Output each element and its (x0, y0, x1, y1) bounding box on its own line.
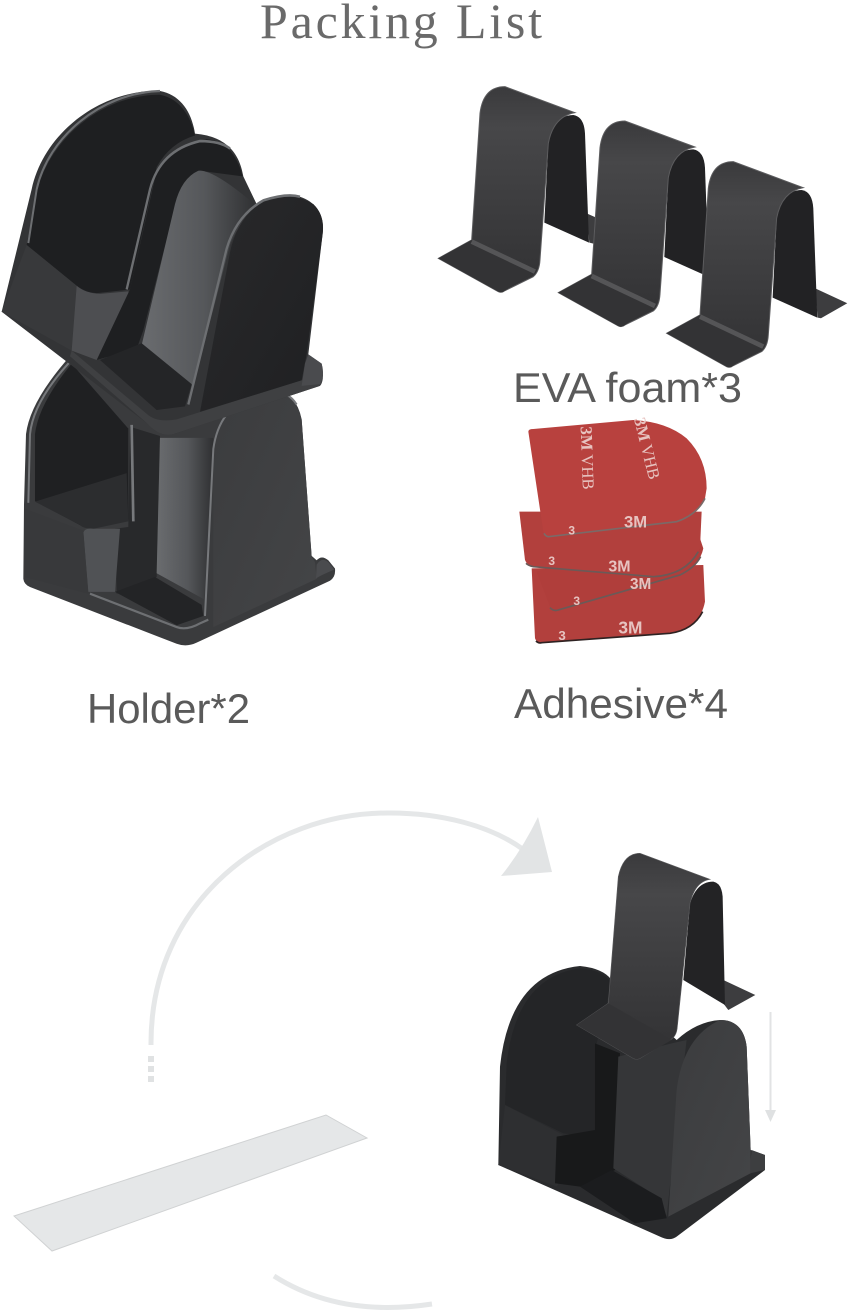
label: adhesive: Adhesive*4 (514, 680, 728, 727)
pad 2: 3 (548, 554, 555, 568)
icon: EVA foam strips (438, 87, 847, 367)
pad 3: 3M (630, 576, 651, 593)
pad 4: 3 (558, 628, 566, 643)
pad 4 (532, 565, 705, 643)
pad 4: 3M (618, 617, 642, 637)
pad 1: 3M VHB (577, 426, 598, 490)
pad 3 (537, 528, 703, 610)
pad 1: 3M (624, 513, 647, 532)
arrow: bottom arc (274, 1276, 432, 1308)
label: EVA foam: EVA foam*3 (513, 364, 742, 411)
pad 2 (519, 512, 702, 577)
icon: adhesive pads (519, 415, 707, 643)
lower holder (23, 354, 335, 645)
mounted holder (498, 966, 765, 1239)
metal plate strip (14, 1115, 367, 1251)
arrow: curved top arc (151, 813, 552, 1086)
icon: stacked holders (2, 91, 335, 645)
pad 1 (528, 415, 707, 537)
icon: holder with foam strip (498, 853, 765, 1239)
pad 1: 3M VHB (630, 415, 664, 481)
pad 3: 3 (573, 594, 580, 608)
label: holder: Holder*2 (87, 685, 250, 732)
arrow: downward arrow (765, 1012, 776, 1122)
foam strip 2 (558, 121, 709, 327)
foam strip on holder (577, 853, 755, 1059)
pad 1: 3 (568, 523, 575, 537)
pad 2: 3M (608, 559, 631, 576)
foam strip 3 (667, 162, 847, 367)
foam strip 1 (438, 87, 596, 292)
upper holder (2, 91, 323, 435)
